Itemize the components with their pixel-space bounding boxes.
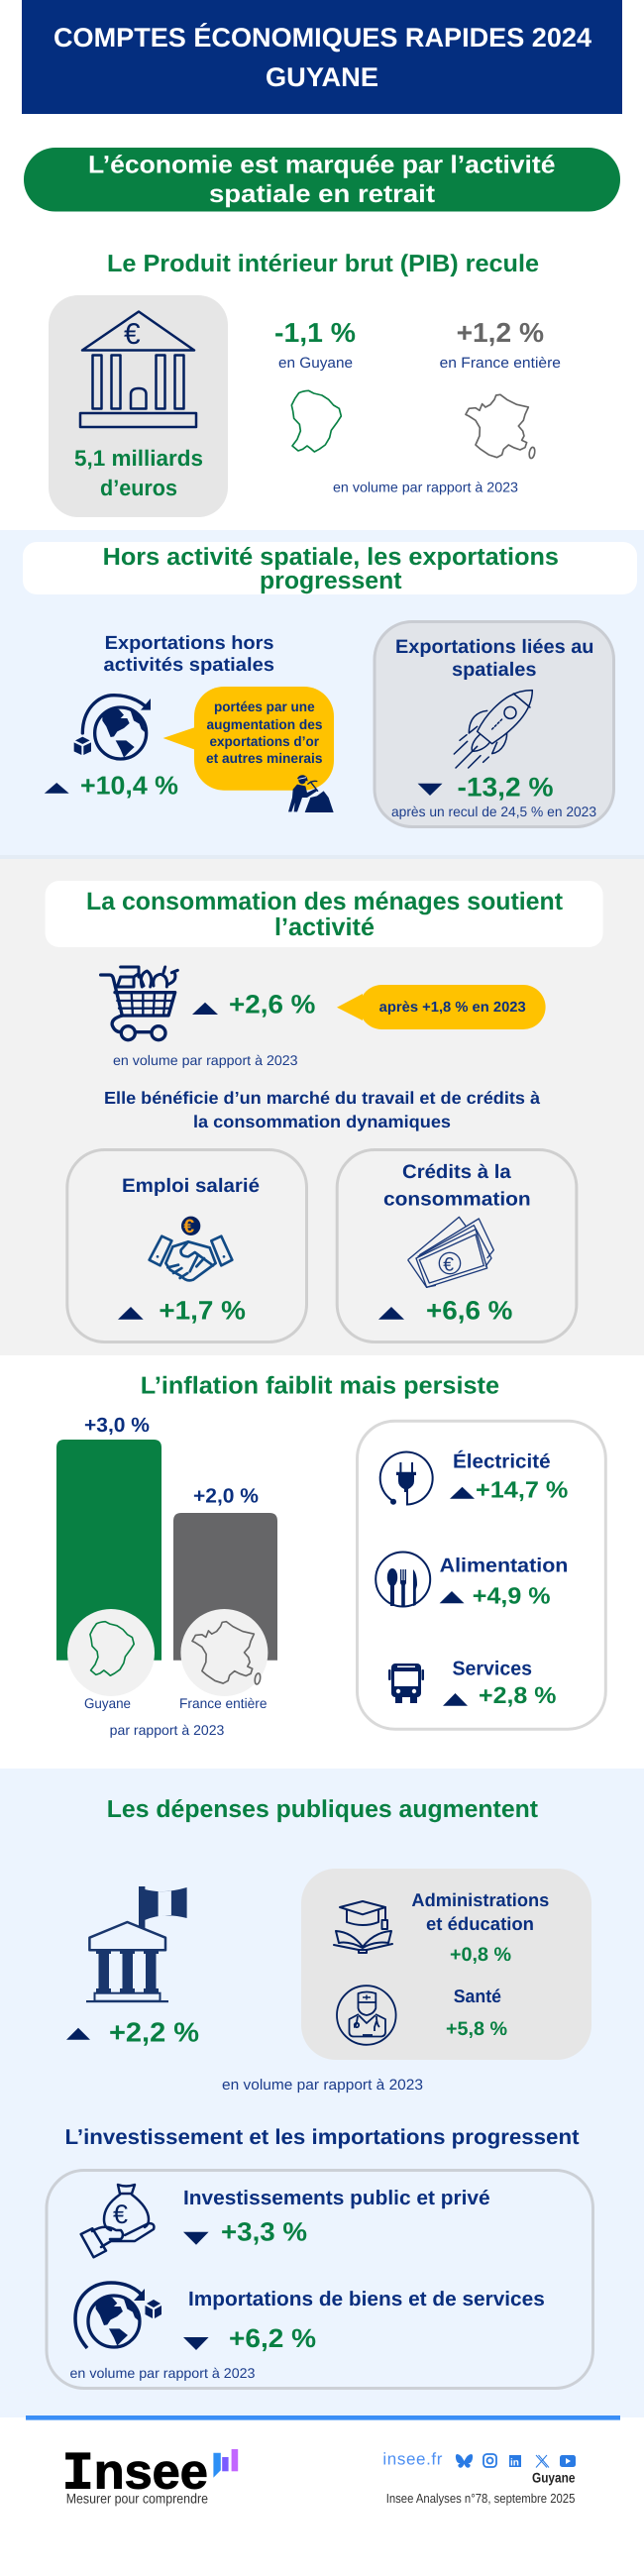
panel: household consumption <box>0 859 644 1355</box>
icon: shopping cart <box>101 967 177 1040</box>
triangle up <box>66 2028 90 2040</box>
label: Guyane: Guyane <box>532 2470 576 2486</box>
icon: globe with arrow <box>74 696 151 759</box>
title <box>54 23 591 92</box>
logo: Insee <box>61 2444 238 2507</box>
icon: money bag in hand <box>81 2185 154 2257</box>
logo: Insee: nsee <box>94 2444 208 2500</box>
card: administrations and health: et éducation <box>426 1913 534 1934</box>
title: GUYANE <box>266 62 378 92</box>
logo: Insee: I <box>61 2445 94 2506</box>
bar chart: +2,0 % <box>193 1485 259 1508</box>
icon: handshake and coin: € <box>183 1216 194 1236</box>
icon: instagram <box>483 2454 496 2467</box>
card: 5,1 milliards d'euros: d’euros <box>100 476 177 500</box>
card: salaried employment: Emploi salarié <box>122 1175 260 1197</box>
stat: France: +1,2 % <box>457 317 544 348</box>
heading: exports: Hors activité spatiale, les exportations <box>103 544 559 571</box>
source: Insee Analyses n°78, septembre 2025 <box>386 2491 575 2506</box>
logo: Insee: Mesurer pour comprendre <box>66 2491 208 2507</box>
panel: household consumption: +2,6 % <box>229 990 315 1020</box>
panel: PIB <box>49 251 561 517</box>
icon: bank: € <box>124 318 141 351</box>
item: imports: Importations de biens et de services <box>188 2288 545 2310</box>
stat: Guyane: en Guyane <box>278 355 353 372</box>
item: food <box>376 1552 568 1608</box>
footer rule <box>26 2415 620 2420</box>
card: 5,1 milliards d'euros <box>49 295 228 517</box>
card: consumer credit <box>337 1149 577 1342</box>
title: COMPTES ÉCONOMIQUES RAPIDES 2024 <box>54 23 591 53</box>
icon: map of Guyane <box>291 390 341 452</box>
triangle down <box>418 784 442 796</box>
icon: map of France <box>192 1622 262 1684</box>
triangle up <box>45 783 69 794</box>
callout: gold: et autres minerais <box>206 750 323 766</box>
card: space exports: Exportations liées au <box>395 636 594 658</box>
icon: linkedin <box>509 2455 521 2469</box>
icon: cutlery <box>376 1552 430 1607</box>
subheading: la consommation dynamiques <box>193 1112 451 1131</box>
exports excluding space <box>45 633 334 812</box>
item: food: Alimentation <box>440 1556 568 1577</box>
card: consumer credit: Crédits à la <box>402 1161 511 1183</box>
icon: linkedin: in <box>510 2457 519 2469</box>
heading: inflation: L’inflation faiblit mais persiste <box>141 1373 499 1400</box>
triangle up <box>378 1307 404 1320</box>
panel: exports <box>0 530 644 859</box>
item: imports: +6,2 % <box>229 2323 316 2353</box>
card: investment and imports <box>47 2170 592 2388</box>
panel: public spending and investment <box>0 1769 644 2417</box>
subtitle pill: spatiale en retrait <box>209 180 436 208</box>
icon: bus <box>388 1664 424 1703</box>
icon: handshake and coin <box>150 1216 232 1280</box>
note: en volume par rapport à 2023 <box>222 2077 423 2093</box>
card: salaried employment <box>67 1149 307 1342</box>
icon: graduation cap and book <box>334 1901 392 1953</box>
note: en volume par rapport à 2023 <box>333 480 518 495</box>
heading: PIB: Le Produit intérieur brut (PIB) recule <box>107 251 539 277</box>
note: en volume par rapport à 2023 <box>113 1052 298 1068</box>
bar chart <box>56 1414 277 1738</box>
item: investment: Investissements public et privé <box>183 2187 490 2209</box>
heading: consumption: l’activité <box>274 913 375 941</box>
card: administrations and health: Administrations <box>411 1889 549 1910</box>
card: administrations and health: +5,8 % <box>446 2018 507 2040</box>
icon: banknotes: € <box>443 1253 454 1275</box>
icon: youtube <box>560 2455 576 2467</box>
triangle up <box>118 1307 144 1320</box>
card: 5,1 milliards d'euros: 5,1 milliards <box>74 446 203 471</box>
subtitle pill <box>24 148 620 212</box>
card: consumer credit: +6,6 % <box>426 1296 512 1326</box>
icon: bank <box>80 311 196 427</box>
exports excluding space: activités spatiales <box>103 655 274 676</box>
panel: public spending and investment: +2,2 % <box>109 2017 199 2048</box>
callout: gold: exportations d’or <box>210 733 320 749</box>
bar chart: France entière <box>179 1695 268 1711</box>
card: salaried employment: +1,7 % <box>159 1296 246 1326</box>
card: administrations and health: Santé <box>454 1986 501 2006</box>
stat: Guyane: -1,1 % <box>274 317 356 348</box>
item: food: +4,9 % <box>473 1582 551 1608</box>
callout: gold <box>163 687 334 791</box>
panel: inflation <box>56 1373 605 1738</box>
item: electricity: Électricité <box>453 1450 551 1473</box>
item: imports <box>75 2283 545 2353</box>
note: en volume par rapport à 2023 <box>69 2365 256 2381</box>
item: investment: € <box>113 2200 128 2229</box>
card: space exports: -13,2 % <box>458 772 553 802</box>
icon: x <box>536 2455 549 2467</box>
callout: after 1.8%: après +1,8 % en 2023 <box>379 1000 526 1016</box>
stat: France: en France entière <box>440 355 561 372</box>
item: services <box>388 1659 556 1708</box>
item: investment <box>81 2185 490 2257</box>
card: consumer credit: consommation <box>383 1189 531 1211</box>
heading: exports <box>23 542 637 594</box>
subheading: Elle bénéficie d’un marché du travail et de crédits à <box>104 1088 540 1108</box>
bar chart: par rapport à 2023 <box>110 1722 225 1738</box>
header banner <box>22 0 622 114</box>
item: electricity: +14,7 % <box>476 1477 569 1503</box>
card: space exports: spatiales <box>452 659 537 681</box>
card: administrations and health <box>301 1869 591 2060</box>
icon: globe with arrow <box>75 2283 161 2348</box>
item: services: +2,8 % <box>479 1682 556 1708</box>
exports excluding space: +10,4 % <box>80 771 178 801</box>
card: space exports <box>375 622 614 826</box>
callout: gold: augmentation des <box>206 716 323 732</box>
item: electricity <box>380 1450 569 1505</box>
heading: public spending: Les dépenses publiques augmentent <box>107 1796 538 1823</box>
triangle up <box>192 1003 218 1015</box>
icon: map of France <box>466 394 536 459</box>
subheading <box>104 1088 540 1131</box>
icon: rocket <box>454 691 532 768</box>
item: services: Services <box>452 1659 532 1680</box>
stat: Guyane <box>274 317 356 452</box>
callout: gold: portées par une <box>214 698 315 714</box>
heading: consumption <box>46 881 603 947</box>
card: space exports: après un recul de 24,5 % en 2023 <box>391 804 596 819</box>
callout: after 1.8% <box>337 985 546 1029</box>
heading: consumption: La consommation des ménages soutient <box>86 888 564 915</box>
heading: exports: progressent <box>260 568 402 594</box>
icon: map of Guyane <box>90 1622 134 1675</box>
icon: bluesky <box>456 2454 473 2468</box>
bar chart: Guyane <box>84 1695 131 1711</box>
icon: miner <box>288 775 334 812</box>
card: administrations and health: +0,8 % <box>450 1944 511 1966</box>
icon: government building with flag <box>86 1886 187 2002</box>
link: insee.fr: insee.fr <box>382 2450 443 2469</box>
icon: plug <box>380 1452 433 1505</box>
icon: doctor <box>337 1986 396 2045</box>
footer <box>61 2444 576 2507</box>
subtitle pill: L’économie est marquée par l’activité <box>88 152 556 179</box>
icon: banknotes <box>408 1217 493 1287</box>
card: inflation by item <box>357 1421 605 1729</box>
bar chart: +3,0 % <box>84 1414 150 1437</box>
stat: France <box>440 317 561 459</box>
exports excluding space: Exportations hors <box>105 633 273 654</box>
item: investment: +3,3 % <box>221 2217 307 2247</box>
heading: investment and imports: L’investissement et les importations progressent <box>65 2125 579 2149</box>
